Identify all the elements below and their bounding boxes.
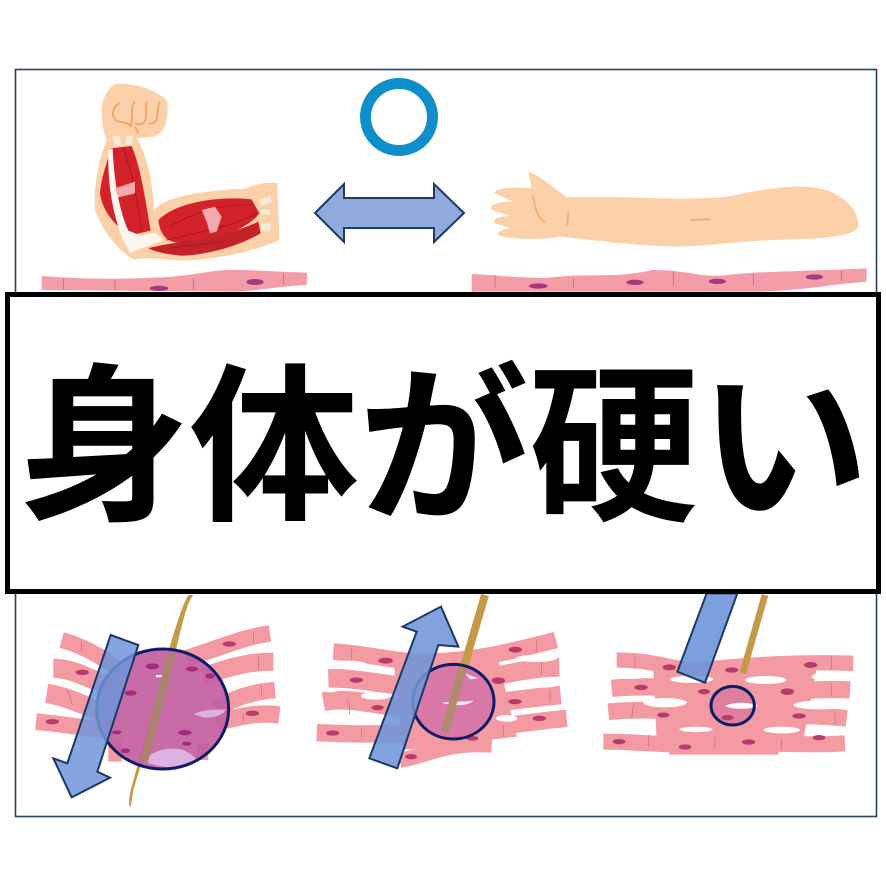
icon: straight arm xyxy=(491,172,858,247)
icon: check circle xyxy=(366,84,432,150)
illustration: dense fibres with small damage xyxy=(600,593,853,750)
icon: muscle fibre under flexed arm xyxy=(42,270,307,292)
panel: bottom stretch illustrations xyxy=(36,593,853,807)
icon: muscle fibre under straight arm xyxy=(472,268,867,292)
muscle tissue xyxy=(36,632,279,762)
muscle tissue xyxy=(600,655,853,750)
arrow: double headed xyxy=(315,184,464,242)
damage circle xyxy=(711,686,758,725)
panel: flexible muscle top row xyxy=(42,84,867,292)
illustration: medium stretch with medium damage xyxy=(317,595,567,768)
arrow: downward stretch xyxy=(53,635,138,797)
stick xyxy=(743,595,765,673)
damage circle xyxy=(97,649,229,769)
arrow: upward stretch xyxy=(369,607,458,768)
damage circle xyxy=(413,664,494,739)
icon: flexed arm with muscles xyxy=(95,84,279,261)
arrow: pressing stick xyxy=(677,593,737,683)
title text: 身体が硬い xyxy=(19,354,869,544)
stick xyxy=(445,595,485,732)
illustration: overstretched fibres with large damage xyxy=(36,595,279,807)
banner box xyxy=(8,294,878,592)
stick xyxy=(129,595,193,807)
muscle tissue xyxy=(317,640,567,760)
